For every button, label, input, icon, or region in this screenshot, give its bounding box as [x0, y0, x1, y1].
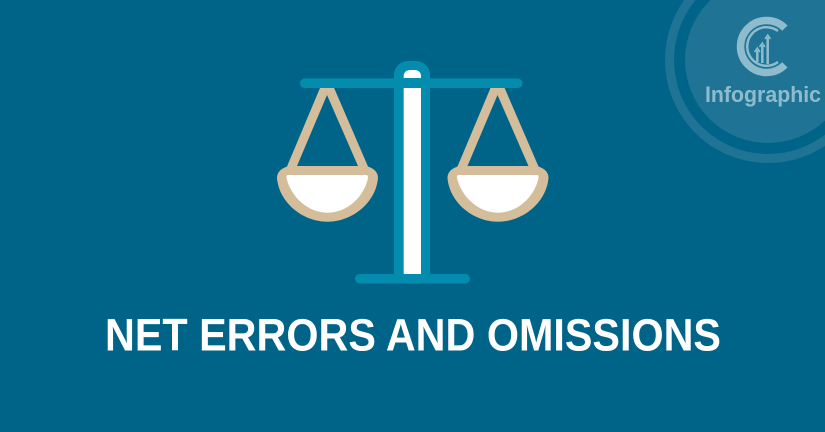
scale post	[394, 61, 430, 279]
right pan	[448, 78, 548, 222]
icon: balance scale	[277, 61, 548, 284]
title: NET ERRORS AND OMISSIONS	[105, 310, 721, 360]
logo badge	[670, 0, 825, 158]
scale beam	[300, 78, 522, 88]
scale base	[355, 274, 470, 284]
logo wordmark: Infographic	[705, 82, 821, 107]
left pan	[277, 78, 378, 222]
icon: logo C with rising arrows	[741, 21, 785, 73]
